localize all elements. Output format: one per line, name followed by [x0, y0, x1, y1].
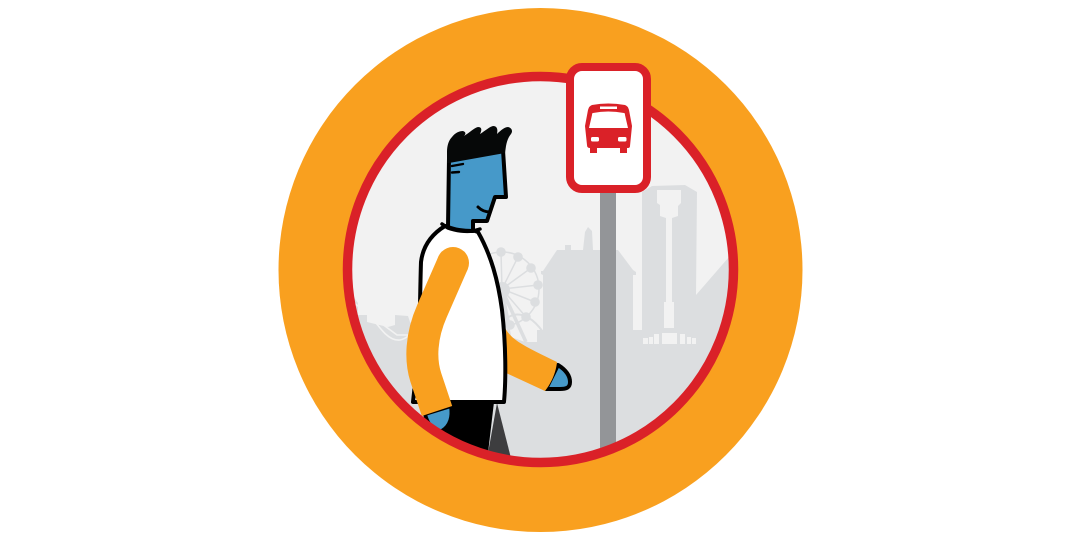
roller coaster [356, 304, 408, 341]
ferris wheel [490, 247, 543, 342]
person [413, 126, 570, 470]
brow lines [452, 164, 463, 172]
mouth [478, 207, 490, 212]
scene background [352, 81, 729, 458]
rear leg [488, 404, 510, 456]
tower base blocks [643, 333, 696, 344]
icon: bus [585, 104, 632, 153]
orange outer circle [278, 8, 802, 532]
near hand [423, 408, 450, 430]
far arm [504, 328, 557, 391]
red ring [348, 76, 734, 462]
tower cutout [657, 190, 681, 328]
bus stop pole [600, 190, 616, 460]
bus stop illustration [278, 8, 802, 532]
city skyline and ground [354, 185, 729, 458]
shirt [413, 226, 505, 402]
face [448, 150, 506, 231]
trousers [444, 404, 494, 450]
far hand [546, 365, 570, 389]
near arm [422, 247, 469, 411]
bus stop sign [570, 67, 647, 189]
sky [352, 81, 728, 342]
hair [447, 126, 512, 163]
collar [442, 224, 480, 231]
